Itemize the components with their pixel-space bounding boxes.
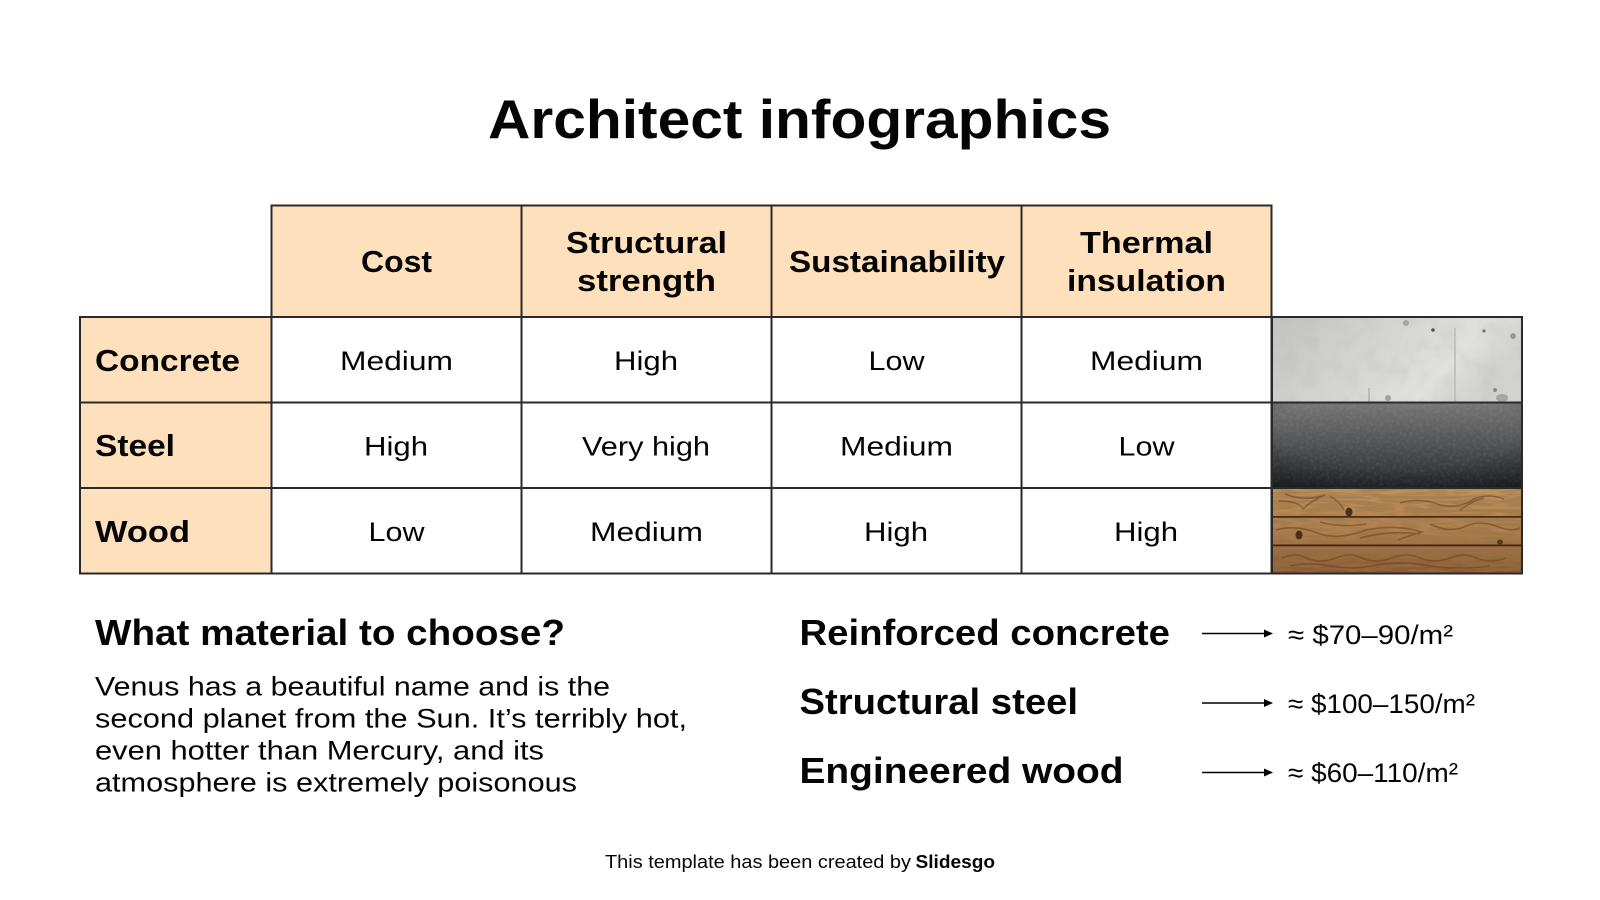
image: steel texture [1272, 402, 1522, 488]
price item: engineered wood [800, 750, 1458, 791]
image: concrete texture [1272, 317, 1522, 402]
price item: engineered wood: ≈ $60–110/m² [1288, 758, 1458, 788]
heading: what material to choose: What material to choose? [95, 612, 565, 653]
row: Concrete: Medium [340, 346, 453, 376]
row: Wood: Medium [590, 517, 703, 547]
row: Steel [80, 402, 1272, 488]
column header: Cost: Cost [361, 244, 432, 279]
body text block [95, 672, 687, 798]
row: Steel: Medium [840, 432, 953, 462]
price item: structural steel: Structural steel [800, 681, 1078, 722]
body text block: Venus has a beautiful name and is the [95, 672, 610, 702]
row: Concrete: Medium [1090, 346, 1203, 376]
row: Steel: Steel [95, 428, 175, 463]
row: Concrete: High [614, 346, 678, 376]
row: Steel: High [364, 432, 428, 462]
title: Architect infographics [488, 88, 1111, 150]
column header: Thermal insulation [1022, 206, 1272, 317]
column header: Thermal insulation: insulation [1067, 263, 1226, 298]
column header: Thermal insulation: Thermal [1080, 225, 1213, 260]
price item: reinforced concrete: ≈ $70–90/m² [1288, 620, 1453, 650]
column header: Structural strength: Structural [566, 225, 727, 260]
body text block: atmosphere is extremely poisonous [95, 768, 577, 798]
price item: structural steel [800, 681, 1475, 722]
row: Wood [80, 488, 1272, 574]
footer credit: Slidesgo [916, 852, 995, 872]
row: Steel: Low [1118, 432, 1175, 462]
footer credit: This template has been created by [605, 852, 911, 872]
row: Concrete: Low [868, 346, 925, 376]
arrow [1202, 699, 1273, 707]
body text block: second planet from the Sun. It’s terribly hot, [95, 704, 687, 734]
row: Wood: Low [368, 517, 425, 547]
column header: Cost [272, 206, 522, 317]
arrow [1202, 630, 1273, 638]
price item: engineered wood: Engineered wood [800, 750, 1124, 791]
row: Wood: High [864, 517, 928, 547]
column header: Structural strength: strength [577, 263, 716, 298]
column header: Sustainability: Sustainability [789, 244, 1006, 279]
price item: reinforced concrete [800, 612, 1453, 653]
row: Wood: Wood [95, 514, 190, 549]
column header: Sustainability [772, 206, 1022, 317]
price item: reinforced concrete: Reinforced concrete [800, 612, 1170, 653]
price item: structural steel: ≈ $100–150/m² [1288, 689, 1475, 719]
body text block: even hotter than Mercury, and its [95, 736, 544, 766]
column header: Structural strength [522, 206, 772, 317]
arrow [1202, 768, 1273, 776]
row: Wood: High [1114, 517, 1178, 547]
image: wood texture [1272, 488, 1522, 574]
row: Steel: Very high [582, 432, 710, 462]
row: Concrete [80, 317, 1272, 402]
comparison table [80, 206, 1522, 574]
row: Concrete: Concrete [95, 343, 240, 378]
